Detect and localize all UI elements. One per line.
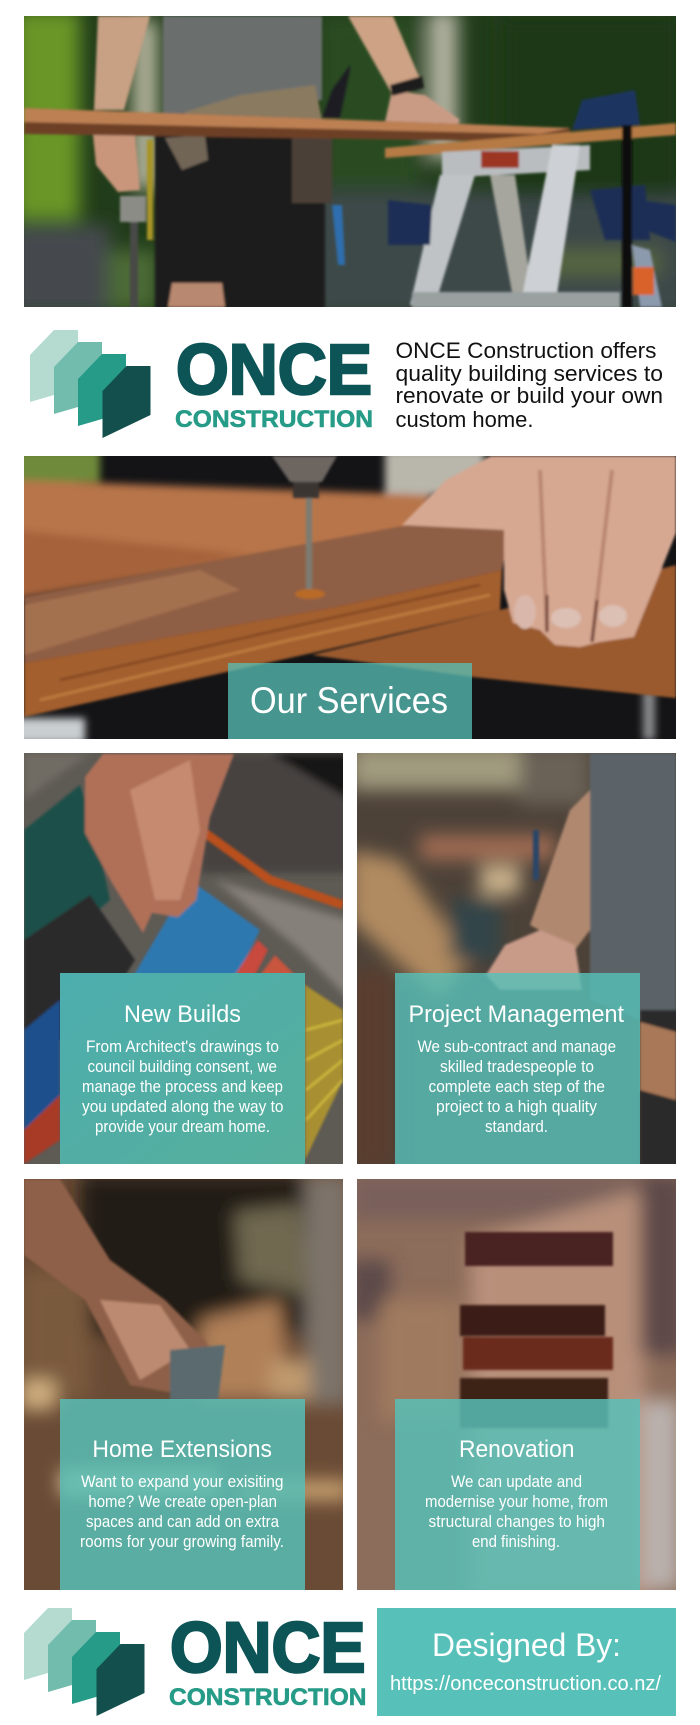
card body: rooms for your growing family. xyxy=(80,1533,284,1551)
intro text: custom home. xyxy=(396,407,534,432)
card title: New Builds xyxy=(124,1001,241,1028)
icon: stacked building shapes xyxy=(24,1608,144,1716)
intro text: renovate or build your own xyxy=(396,383,663,408)
footer box: designed by: Designed By: xyxy=(432,1627,621,1663)
panel: Renovation xyxy=(350,1175,685,1600)
photo: stacked timber xyxy=(350,1175,685,1600)
shirt xyxy=(163,16,322,125)
card body: Want to expand your exisiting xyxy=(81,1473,284,1491)
card body: end finishing. xyxy=(472,1533,560,1551)
overlay card xyxy=(395,973,640,1164)
board side xyxy=(24,570,502,717)
card body xyxy=(418,1038,616,1136)
card body: We can update and xyxy=(451,1473,582,1491)
card body xyxy=(82,1038,284,1136)
card body: council building consent, we xyxy=(88,1058,277,1076)
wordmark: ONCE xyxy=(176,331,372,410)
board top face xyxy=(24,510,513,663)
card body: skilled tradespeople to xyxy=(440,1058,594,1076)
photo: drilling into timber xyxy=(15,450,676,743)
plank lower right xyxy=(312,565,676,698)
card body: complete each step of the xyxy=(428,1078,605,1096)
overlay card xyxy=(395,1399,640,1590)
card body: We sub-contract and manage xyxy=(418,1038,616,1056)
hand xyxy=(402,456,676,647)
photo: arm with tool xyxy=(20,1175,350,1590)
section heading: Our Services: Our Services xyxy=(250,680,448,721)
card body: standard. xyxy=(485,1118,548,1136)
panel: New Builds xyxy=(24,753,350,1168)
logo: ONCE Construction xyxy=(30,330,373,438)
plank xyxy=(24,120,572,142)
overlay card xyxy=(60,1399,305,1590)
footer box: designed by xyxy=(377,1608,676,1716)
card body: From Architect's drawings to xyxy=(86,1038,279,1056)
card title: Home Extensions xyxy=(92,1436,272,1463)
photo: worker's hand, blurred workshop xyxy=(350,745,680,1170)
card body: home? We create open-plan xyxy=(88,1493,277,1511)
footer box: designed by: https://onceconstruction.co.nz/ xyxy=(390,1673,661,1695)
overlay card xyxy=(60,973,305,1164)
section heading: Our Services xyxy=(228,663,472,739)
card body: manage the process and keep xyxy=(82,1078,283,1096)
icon: stacked building shapes xyxy=(30,330,150,438)
wordmark: CONSTRUCTION xyxy=(175,406,373,433)
wordmark: CONSTRUCTION xyxy=(169,1684,366,1711)
card body: project to a high quality xyxy=(436,1098,598,1116)
card title: Renovation xyxy=(459,1436,574,1463)
intro text: quality building services to xyxy=(396,361,663,386)
intro text xyxy=(396,338,663,432)
drill xyxy=(272,456,337,482)
card body: provide your dream home. xyxy=(95,1118,270,1136)
card body: you updated along the way to xyxy=(82,1098,284,1116)
card body xyxy=(80,1473,284,1551)
card title: Project Management xyxy=(408,1001,624,1028)
card body xyxy=(425,1473,608,1551)
wordmark: ONCE xyxy=(170,1609,366,1688)
card body: spaces and can add on extra xyxy=(86,1513,280,1531)
photo: carpenter with plank and sawhorse xyxy=(10,10,690,315)
footer logo: ONCE Construction xyxy=(24,1608,366,1716)
panel: Project Management xyxy=(350,745,680,1170)
card body: structural changes to high xyxy=(428,1513,605,1531)
card body: modernise your home, from xyxy=(425,1493,608,1511)
panel: Home Extensions xyxy=(20,1175,350,1590)
sawhorse xyxy=(442,145,590,178)
intro text: ONCE Construction offers xyxy=(396,338,656,363)
photo: hand with packers xyxy=(24,753,350,1168)
